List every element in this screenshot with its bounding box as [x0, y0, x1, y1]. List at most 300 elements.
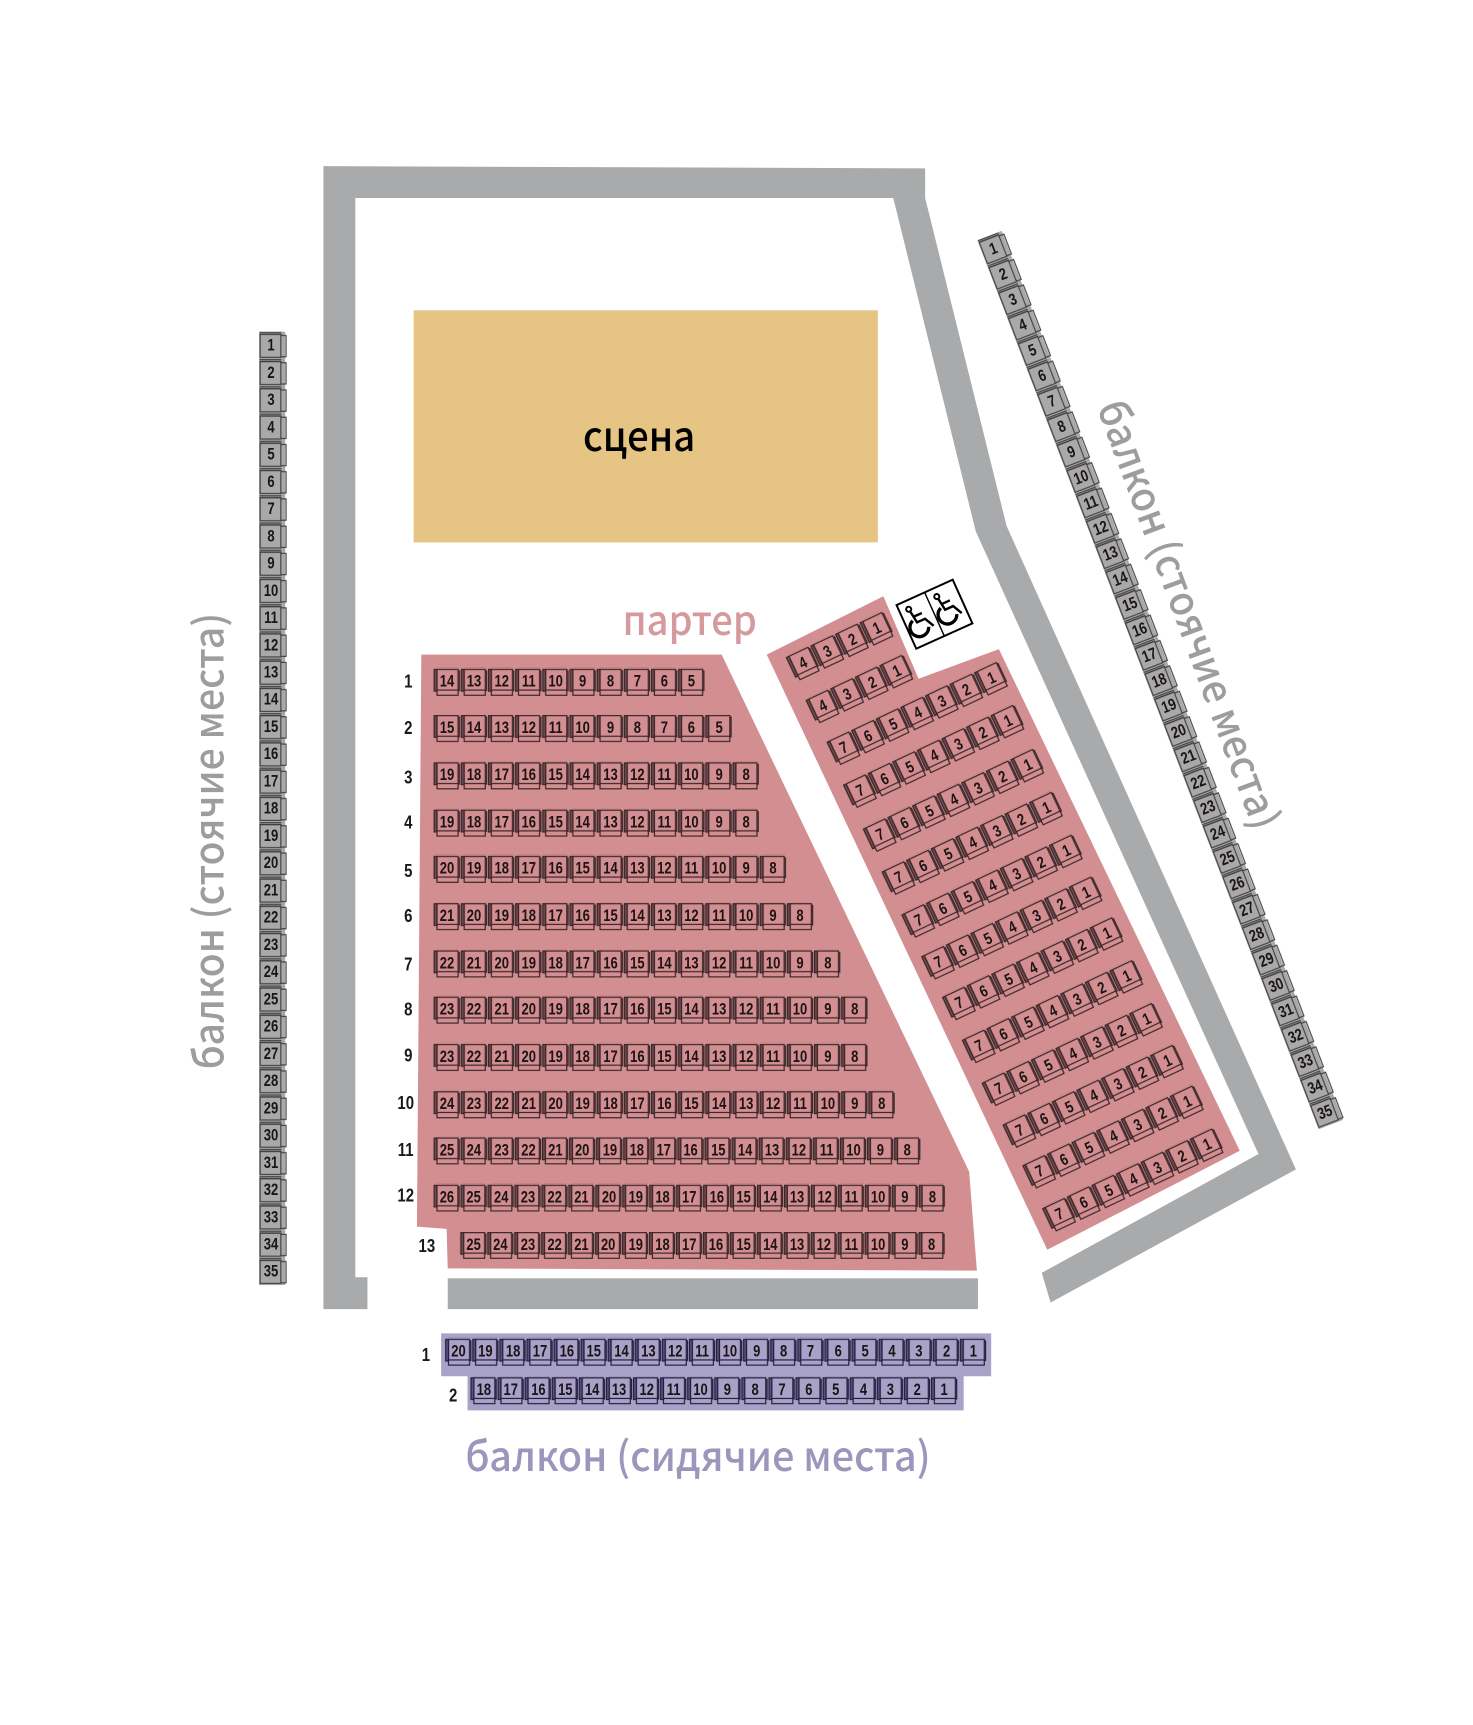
right row K: 3 [1091, 1034, 1105, 1053]
right row E: 2 [996, 768, 1010, 787]
right row C: 2 [960, 681, 974, 700]
panel: left standing balcony: 30 [264, 1127, 278, 1145]
row 13: 15 [736, 1237, 751, 1254]
row 4: 15 [548, 814, 563, 832]
row 13: 13 [790, 1237, 804, 1254]
panel: right standing balcony: 33 [1296, 1051, 1316, 1073]
row numbers [397, 671, 435, 1256]
panel: right standing balcony: 32 [1286, 1026, 1306, 1048]
right row M: 6 [1057, 1151, 1071, 1170]
row 9: 22 [467, 1049, 481, 1066]
panel: left standing balcony: 7 [267, 501, 275, 519]
balcony row 1: 15 [587, 1343, 601, 1361]
panel: left standing balcony: 34 [264, 1236, 279, 1254]
right row K: 7 [992, 1080, 1006, 1099]
balcony row labels: 1 [422, 1344, 430, 1365]
right row G: 1 [1060, 842, 1074, 861]
panel: left standing balcony: 35 [264, 1264, 278, 1281]
right row A: 4 [796, 654, 811, 673]
panel: right standing balcony: 19 [1159, 696, 1179, 718]
panel: right standing balcony: 16 [1130, 620, 1150, 641]
row 6: 10 [739, 908, 753, 925]
row 5: 9 [742, 860, 750, 878]
row 10: 10 [821, 1096, 835, 1114]
row numbers: 5 [404, 860, 413, 881]
right row F: 4 [966, 834, 981, 853]
balcony row 2 [470, 1376, 958, 1404]
row 11: 23 [494, 1142, 509, 1160]
row 4: 9 [716, 814, 723, 832]
row 12: 22 [548, 1189, 562, 1207]
panel: left standing balcony: 31 [264, 1155, 278, 1172]
row 7: 21 [467, 955, 481, 973]
row 13: 18 [655, 1237, 670, 1254]
right row J: 6 [997, 1026, 1011, 1045]
panel: right standing balcony: 11 [1082, 493, 1101, 514]
panel: right standing balcony: 17 [1140, 645, 1160, 667]
row 4: 18 [467, 814, 481, 832]
panel: left standing balcony: 23 [264, 937, 278, 954]
row 3: 13 [603, 767, 618, 785]
row 7 [433, 949, 841, 978]
row 4: 11 [657, 814, 671, 832]
panel: left standing balcony: 32 [264, 1182, 278, 1199]
panel: right standing balcony: 2 [997, 265, 1010, 284]
balcony row 1: 18 [506, 1343, 520, 1361]
right row F: 3 [990, 822, 1005, 841]
panel: left standing balcony: 29 [264, 1100, 278, 1118]
row 7: 17 [575, 955, 590, 973]
row 2: 14 [467, 720, 482, 737]
right row N: 3 [1151, 1159, 1165, 1178]
balcony row 2: 2 [914, 1382, 921, 1400]
panel: left standing balcony: 13 [264, 664, 278, 682]
right row E [862, 747, 1046, 854]
panel: right standing balcony: 34 [1305, 1077, 1326, 1098]
right row E: 7 [873, 826, 888, 845]
balcony row 1: 6 [835, 1343, 842, 1361]
row 8: 15 [657, 1001, 672, 1019]
row 5: 16 [548, 860, 563, 878]
panel: right standing balcony: 12 [1091, 518, 1111, 540]
right row L: 7 [1013, 1122, 1027, 1141]
right row M: 1 [1181, 1093, 1195, 1112]
balcony row 1: 2 [943, 1343, 950, 1361]
row 6: 9 [769, 908, 777, 925]
row 4 [433, 809, 759, 837]
panel: right standing balcony: 10 [1071, 467, 1091, 489]
row numbers: 10 [397, 1092, 414, 1113]
balcony row 1: 11 [695, 1343, 709, 1361]
panel: right standing balcony: 21 [1179, 747, 1199, 768]
right row A [785, 610, 895, 682]
row 2: 13 [495, 720, 509, 737]
row 7: 13 [684, 955, 699, 973]
row numbers: 6 [404, 905, 413, 926]
balcony row 2: 10 [693, 1382, 708, 1400]
row 10: 20 [548, 1096, 563, 1114]
right row F: 7 [892, 869, 906, 888]
panel: left standing balcony: 19 [264, 828, 278, 845]
panel: right standing balcony: 26 [1227, 874, 1247, 895]
panel: left standing balcony: 22 [264, 909, 278, 927]
panel: right standing balcony: 18 [1149, 670, 1169, 692]
row 5 [433, 855, 786, 883]
row 12: 23 [521, 1189, 535, 1207]
right row D [842, 703, 1026, 810]
row 3: 10 [684, 767, 699, 785]
right row M: 5 [1083, 1139, 1097, 1158]
row 11: 24 [467, 1142, 482, 1160]
panel: right standing balcony: 25 [1218, 848, 1238, 870]
right row G [900, 833, 1084, 939]
right row C: 6 [862, 727, 876, 746]
row numbers: 1 [404, 671, 413, 692]
right row C: 4 [911, 704, 926, 723]
row 3: 9 [716, 767, 723, 785]
right row C: 3 [935, 693, 950, 712]
row 5: 20 [440, 860, 454, 878]
row 3: 19 [440, 767, 454, 785]
row 1: 7 [634, 673, 641, 691]
row 6: 8 [796, 908, 804, 925]
right row N: 1 [1201, 1136, 1215, 1155]
icon: wheelchair spaces [897, 580, 972, 649]
row 7: 11 [739, 955, 753, 973]
row 12: 17 [682, 1189, 696, 1207]
row 10: 16 [657, 1096, 672, 1114]
right row K: 4 [1066, 1045, 1081, 1064]
panel: right standing balcony: 31 [1276, 1001, 1296, 1022]
panel: left standing balcony [258, 332, 288, 1285]
panel: left standing balcony: 15 [264, 719, 278, 736]
right row D: 4 [928, 747, 942, 766]
row 11: 18 [630, 1142, 644, 1160]
right row H: 5 [981, 930, 995, 949]
row 13 [460, 1231, 945, 1259]
row 7: 12 [712, 955, 726, 973]
right row H: 2 [1054, 896, 1069, 915]
row 13: 25 [466, 1237, 481, 1254]
right row J: 3 [1071, 991, 1085, 1010]
stage [414, 310, 878, 542]
balcony row 2: 13 [612, 1382, 626, 1400]
row 12: 10 [871, 1189, 885, 1207]
balcony row 1: 5 [861, 1343, 869, 1361]
right row L: 2 [1136, 1064, 1150, 1083]
row 13: 19 [629, 1237, 643, 1254]
right row G: 2 [1035, 854, 1049, 873]
row 11: 20 [575, 1142, 589, 1160]
row 11: 14 [738, 1142, 753, 1160]
row 6: 12 [684, 908, 699, 925]
row 5: 12 [657, 860, 672, 878]
row 5: 8 [769, 860, 777, 878]
row 9: 13 [712, 1049, 726, 1066]
right row N: 5 [1102, 1182, 1116, 1201]
panel: right standing balcony: 22 [1188, 772, 1208, 794]
balcony row 2: 7 [778, 1382, 786, 1400]
panel: parterre right block [767, 596, 1240, 1250]
right row J: 7 [972, 1037, 987, 1056]
row 9: 12 [739, 1049, 753, 1066]
row 13: 21 [574, 1237, 589, 1254]
row 9: 16 [630, 1049, 645, 1066]
row 2: 6 [688, 720, 695, 737]
right row D: 6 [878, 770, 892, 789]
right row H: 1 [1080, 884, 1094, 903]
panel: right standing balcony: 6 [1036, 367, 1049, 386]
row 12: 11 [845, 1189, 858, 1207]
right row N: 2 [1175, 1148, 1190, 1167]
right row C: 7 [837, 739, 851, 758]
row 13: 8 [928, 1237, 935, 1254]
row 11: 21 [548, 1142, 563, 1160]
right row F: 1 [1040, 799, 1054, 818]
row 5: 13 [630, 860, 645, 878]
row 2: 12 [521, 720, 536, 737]
balcony row 1: 1 [970, 1343, 977, 1361]
row 8: 13 [712, 1001, 726, 1019]
row 11: 25 [440, 1142, 454, 1160]
right row B: 2 [866, 674, 880, 693]
row 1: 11 [522, 673, 536, 691]
right row H: 3 [1030, 907, 1044, 926]
row 11: 10 [846, 1142, 861, 1160]
row 7: 14 [657, 955, 672, 973]
row 1 [433, 668, 705, 696]
panel: left standing balcony: 24 [264, 964, 279, 982]
row 7: 15 [630, 955, 645, 973]
heading: sitting balcony: балкон (сидячие места) [465, 1424, 931, 1483]
panel: left standing balcony: 11 [264, 610, 278, 627]
balcony row 1: 10 [723, 1343, 737, 1361]
right row B [805, 653, 915, 725]
panel: right standing balcony: 23 [1198, 797, 1218, 819]
row 10: 9 [851, 1096, 858, 1114]
row 10: 12 [766, 1096, 780, 1114]
row 2: 15 [440, 720, 454, 737]
row 2 [433, 714, 732, 742]
row 10: 24 [440, 1096, 455, 1114]
row 4: 10 [684, 814, 699, 832]
balcony row 1: 14 [614, 1343, 629, 1361]
right row C [825, 660, 1010, 767]
row 7: 18 [548, 955, 563, 973]
panel: right standing balcony: 3 [1007, 291, 1020, 310]
row 7: 22 [440, 955, 454, 973]
row 9: 21 [495, 1049, 509, 1066]
row 1: 9 [579, 673, 586, 691]
row 11: 11 [820, 1142, 834, 1160]
right row N: 7 [1053, 1205, 1067, 1224]
row 6: 16 [575, 908, 590, 925]
row 7: 9 [796, 955, 804, 973]
balcony row 2: 17 [503, 1382, 518, 1400]
panel: left standing balcony: 33 [264, 1209, 278, 1227]
row numbers: 12 [397, 1185, 414, 1206]
panel: left standing balcony: 6 [267, 474, 275, 491]
row 13: 22 [548, 1237, 562, 1254]
row 5: 18 [495, 860, 509, 878]
panel: left standing balcony: 3 [267, 392, 275, 410]
right row L: 4 [1087, 1087, 1102, 1106]
panel: right standing balcony: 20 [1169, 721, 1189, 743]
row 10: 11 [793, 1096, 807, 1114]
balcony row 2: 5 [832, 1382, 839, 1400]
row 1: 12 [495, 673, 509, 691]
right row G: 3 [1010, 865, 1024, 884]
right row B: 1 [890, 662, 904, 681]
panel: right standing balcony: 8 [1055, 418, 1068, 437]
row 7: 20 [495, 955, 509, 973]
right row J: 2 [1095, 979, 1109, 998]
row 3 [433, 761, 759, 790]
right row E: 6 [898, 814, 912, 833]
row 8: 8 [851, 1001, 858, 1019]
row 8: 11 [766, 1001, 780, 1019]
row 9: 23 [440, 1049, 454, 1066]
right row I: 6 [977, 983, 991, 1002]
right row J [961, 958, 1145, 1065]
panel: right standing balcony: 24 [1208, 823, 1229, 845]
row 8: 14 [684, 1001, 699, 1019]
row 8: 9 [824, 1001, 831, 1019]
row 12: 21 [574, 1189, 589, 1207]
balcony row 2: 16 [531, 1382, 546, 1400]
right row J: 4 [1046, 1002, 1061, 1021]
right row D: 5 [903, 758, 917, 778]
panel: left standing balcony: 16 [264, 746, 278, 764]
row 6: 14 [630, 908, 645, 925]
row 2: 5 [716, 720, 723, 737]
balcony row 1: 12 [668, 1343, 682, 1361]
row 10: 21 [521, 1096, 536, 1114]
panel: right standing balcony: 5 [1026, 342, 1039, 361]
row 4: 13 [603, 814, 618, 832]
row 5: 15 [575, 860, 590, 878]
balcony row 2: 11 [667, 1382, 681, 1400]
row 12: 20 [602, 1189, 616, 1207]
panel: right standing balcony: 35 [1315, 1102, 1335, 1124]
right row K: 1 [1140, 1010, 1154, 1029]
row 6: 20 [467, 908, 481, 925]
row 10: 23 [467, 1096, 481, 1114]
row 13: 9 [901, 1237, 908, 1254]
panel: right standing balcony: 15 [1120, 594, 1140, 616]
right row A: 1 [870, 619, 884, 638]
right row G: 4 [986, 876, 1001, 896]
row 4: 8 [742, 814, 750, 832]
row 9: 17 [603, 1049, 618, 1066]
panel: left standing balcony: 20 [264, 855, 278, 873]
right row L: 1 [1161, 1052, 1175, 1071]
right row B: 4 [816, 697, 831, 716]
row 8: 16 [630, 1001, 645, 1019]
row 11: 22 [521, 1142, 536, 1160]
row 5: 17 [521, 860, 536, 878]
row 10: 13 [739, 1096, 753, 1114]
right row I: 4 [1027, 959, 1041, 978]
row 9: 20 [521, 1049, 536, 1066]
right row L: 3 [1111, 1075, 1126, 1094]
balcony row 2: 15 [558, 1382, 573, 1400]
row 6: 15 [603, 908, 618, 925]
row 1: 10 [548, 673, 563, 691]
row 10 [433, 1090, 895, 1118]
right row I: 1 [1101, 924, 1115, 944]
balcony row labels [422, 1344, 457, 1406]
row 12: 25 [466, 1189, 481, 1207]
heading: right standing balcony: балкон (стоячие места) [1086, 391, 1298, 836]
heading: parterre: партер [623, 588, 757, 647]
row 12: 14 [763, 1189, 778, 1207]
row 11: 8 [904, 1142, 911, 1160]
right row C: 1 [985, 669, 999, 688]
right row C: 5 [887, 716, 901, 735]
right row B: 3 [841, 686, 855, 705]
balcony row 1: 13 [641, 1343, 656, 1361]
balcony row 1: 19 [478, 1343, 493, 1361]
panel: left standing balcony: 21 [264, 882, 278, 900]
row 2: 7 [661, 720, 668, 737]
right row I: 2 [1075, 936, 1089, 955]
row 12: 13 [790, 1189, 804, 1207]
balcony row 1: 16 [560, 1343, 574, 1361]
row 13: 17 [682, 1237, 696, 1254]
right row H [920, 875, 1104, 981]
row 8: 22 [467, 1001, 481, 1019]
panel: left standing balcony: 27 [264, 1046, 278, 1063]
balcony row 2: 3 [887, 1382, 894, 1400]
right row M [1021, 1084, 1205, 1190]
right row I: 7 [953, 994, 967, 1013]
row 8: 21 [495, 1001, 509, 1019]
row 8: 19 [548, 1001, 563, 1019]
panel: left standing balcony: 25 [264, 991, 278, 1009]
row 2: 11 [549, 720, 563, 737]
row numbers: 9 [404, 1045, 413, 1066]
row 10: 15 [684, 1096, 699, 1114]
row 3: 16 [521, 767, 536, 785]
right row N: 6 [1077, 1194, 1091, 1213]
row numbers: 7 [404, 954, 413, 975]
right row K: 2 [1115, 1022, 1129, 1041]
row 8: 23 [440, 1001, 454, 1019]
right row E: 4 [947, 791, 962, 810]
row 1: 6 [661, 673, 668, 691]
row 10: 14 [712, 1096, 727, 1114]
row 7: 19 [521, 955, 536, 973]
row 10: 19 [575, 1096, 590, 1114]
row 12: 18 [655, 1189, 670, 1207]
row numbers: 4 [404, 812, 413, 833]
row 11: 19 [603, 1142, 617, 1160]
row 12: 15 [736, 1189, 751, 1207]
row 13: 20 [601, 1237, 615, 1254]
right row E: 1 [1021, 756, 1035, 775]
row numbers: 11 [398, 1140, 414, 1161]
row 6: 19 [495, 908, 509, 925]
row numbers: 8 [404, 999, 413, 1020]
row 3: 11 [657, 767, 671, 785]
row 11: 17 [656, 1142, 671, 1160]
right row M: 3 [1131, 1116, 1145, 1135]
right row J: 1 [1120, 967, 1134, 986]
row 1: 13 [467, 673, 481, 691]
row 3: 8 [742, 767, 750, 785]
row 12: 19 [629, 1189, 643, 1207]
